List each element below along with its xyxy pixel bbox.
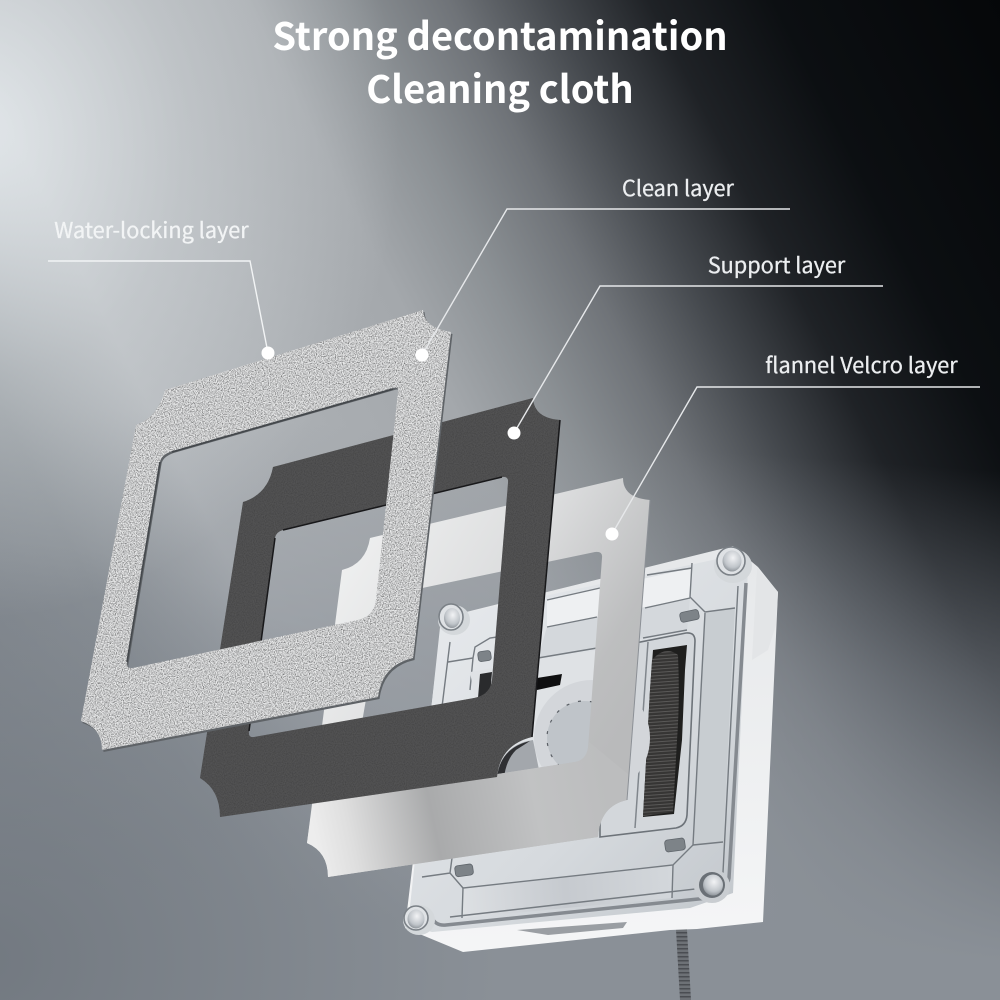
lower plate band [462, 865, 673, 918]
roller track [600, 633, 695, 837]
leader line: flannel Velcro layer [612, 387, 980, 534]
leader line: Water-locking layer [48, 261, 268, 353]
device body [405, 546, 778, 952]
label: Water-locking layer: Water-locking layer [54, 214, 249, 245]
bottom recess [517, 922, 627, 935]
screw: bottom right [694, 869, 730, 903]
label: Support layer: Support layer [708, 249, 846, 280]
dot: Clean layer [416, 348, 428, 362]
cable [675, 912, 691, 1000]
inner lid opening [470, 650, 600, 780]
dot: flannel Velcro layer [606, 528, 618, 540]
label: Clean layer: Clean layer [622, 172, 735, 203]
dot: Support layer [508, 426, 520, 440]
device face plate [408, 558, 748, 932]
water-locking layer [81, 310, 452, 752]
lower band shading [307, 742, 629, 877]
title: Strong decontamination [272, 6, 728, 61]
support layer [200, 398, 560, 817]
roller [643, 645, 687, 817]
center disc [534, 680, 650, 796]
face channel lines [422, 563, 746, 925]
black slot [537, 674, 562, 690]
device: window cleaning robot [403, 546, 778, 1000]
screw: top left [438, 604, 470, 635]
right plate band [693, 608, 735, 845]
leader line: Support layer [514, 286, 883, 433]
leader line: Clean layer [422, 209, 790, 355]
title [272, 6, 728, 114]
dot: Water-locking layer [262, 346, 274, 360]
small vent slots [454, 609, 700, 877]
flannel Velcro layer [307, 478, 650, 877]
screw: bottom left [403, 905, 435, 935]
screw: top right [714, 547, 752, 583]
top white bands [547, 568, 692, 627]
title: Cleaning cloth [366, 59, 634, 114]
label: flannel Velcro layer: flannel Velcro layer [765, 349, 958, 380]
